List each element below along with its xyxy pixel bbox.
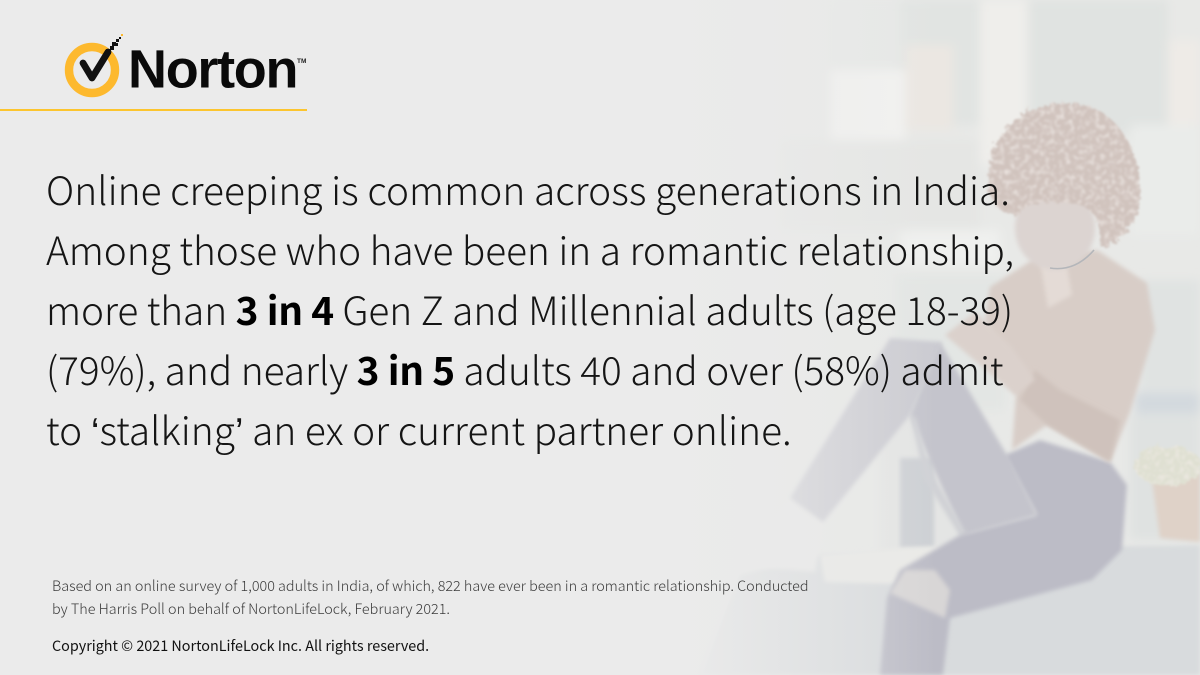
survey footnote: Based on an online survey of 1,000 adults in India, of which, 822 have ever been in a romantic relationship. Conducted (52, 575, 809, 596)
plant pot (1152, 472, 1200, 542)
torso and arms (985, 250, 1155, 462)
icon: pixel trail (106, 34, 123, 54)
main statement text (46, 161, 1014, 457)
logo: Norton (64, 34, 306, 100)
survey footnote (52, 575, 809, 619)
raised thigh (910, 342, 1037, 535)
main statement text: Among those who have been in a romantic relationship, (46, 221, 1014, 277)
copyright: Copyright © 2021 NortonLifeLock Inc. All rights reserved. (52, 635, 429, 656)
lit thigh edge (910, 415, 966, 536)
lower leg (880, 440, 1127, 675)
main statement text: more than 3 in 4 Gen Z and Millennial adults (age 18-39) (46, 281, 1013, 337)
necklace (1050, 250, 1094, 269)
ripped knee (890, 570, 950, 618)
main statement text: to ‘stalking’ an ex or current partner online. (46, 401, 792, 457)
logo wordmark: Norton (128, 40, 297, 100)
main statement text: Online creeping is common across generations in India. (46, 161, 1010, 217)
main statement text: (79%), and nearly 3 in 5 adults 40 and over (58%) admit (46, 341, 1004, 397)
icon: check mark (83, 52, 108, 78)
doorway (900, 458, 934, 548)
shoe (735, 498, 823, 572)
yellow rule under logo (0, 108, 307, 110)
icon: yellow ring (69, 47, 115, 93)
plant (1134, 446, 1200, 486)
raised shin (790, 338, 942, 522)
trademark: TM (297, 58, 306, 65)
hair (988, 103, 1140, 246)
wall (700, 545, 1200, 675)
survey footnote: by The Harris Poll on behalf of NortonLifeLock, February 2021. (52, 598, 450, 619)
face (1015, 186, 1095, 270)
